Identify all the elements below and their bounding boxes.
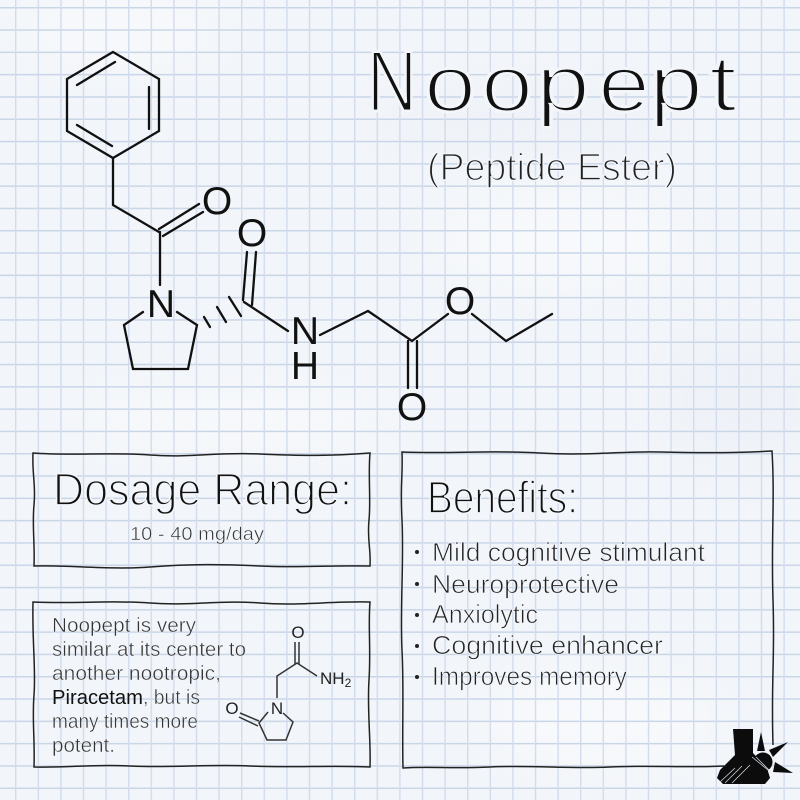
amide and ester chain xyxy=(243,252,552,388)
list bullets xyxy=(415,550,419,679)
chain and carbonyl xyxy=(113,158,203,285)
benefits list xyxy=(432,537,706,691)
stereo hash bond xyxy=(204,297,241,327)
dosage value: 10 - 40 mg/day xyxy=(130,524,264,544)
benefits list: Cognitive enhancer xyxy=(432,630,663,660)
note text: Noopept is very xyxy=(52,615,196,637)
benefits list: Improves memory xyxy=(432,661,627,691)
benefits list: Mild cognitive stimulant xyxy=(432,537,706,567)
molecule: piracetam xyxy=(225,623,352,740)
molecule: piracetam: NH xyxy=(320,669,345,688)
atom labels: O xyxy=(202,180,232,223)
atom labels: N xyxy=(291,310,319,353)
panel: dosage range xyxy=(33,453,370,568)
atom labels: O xyxy=(237,212,267,255)
molecule: piracetam: 2 xyxy=(345,676,352,690)
molecule: piracetam: N xyxy=(271,699,283,718)
heading: dosage range: Dosage Range: xyxy=(53,464,352,515)
atom labels: N xyxy=(147,283,175,326)
title: p xyxy=(536,39,590,128)
atom labels: O xyxy=(445,280,475,323)
subtitle: (Peptide Ester) xyxy=(427,147,677,189)
note text xyxy=(52,615,246,757)
title: o xyxy=(481,39,533,128)
atom labels: O xyxy=(397,386,427,429)
note text: many times more xyxy=(52,711,198,733)
note text: similar at its center to xyxy=(52,639,246,661)
panel: benefits xyxy=(401,451,774,768)
molecule: Noopept structure xyxy=(67,52,552,429)
note text: potent. xyxy=(52,735,115,757)
benefits list: Neuroprotective xyxy=(432,569,619,599)
atom labels: H xyxy=(291,345,319,388)
molecule: piracetam: O xyxy=(225,699,239,718)
note text: , but is xyxy=(143,687,200,709)
title: o xyxy=(424,39,476,128)
title: e xyxy=(598,39,650,128)
panel: piracetam note xyxy=(33,602,370,767)
pyrrolidine ring xyxy=(124,312,197,369)
benzene ring xyxy=(67,52,159,158)
atom labels xyxy=(147,180,475,429)
note text: Piracetam xyxy=(52,687,143,709)
note text: another nootropic, xyxy=(52,663,221,685)
title: N xyxy=(367,34,417,130)
benefits list: Anxiolytic xyxy=(432,599,538,629)
molecule: piracetam: O xyxy=(291,623,305,642)
title: p xyxy=(649,39,703,128)
icon: boot and star logo xyxy=(717,729,793,784)
heading: benefits: Benefits: xyxy=(427,472,578,523)
title: t xyxy=(709,39,737,128)
